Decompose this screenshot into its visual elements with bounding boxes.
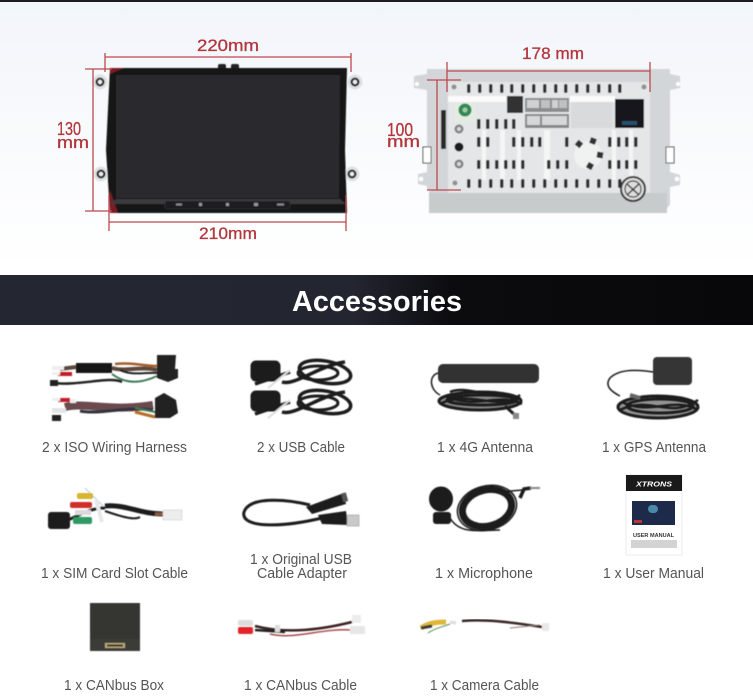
label: 1 x CANbus Cable: [244, 678, 357, 694]
icon: 4G antenna: [431, 364, 539, 419]
icon: USB cables: [251, 357, 353, 418]
item: ISO wiring harness: [42, 355, 187, 456]
heading: 100 mm: [387, 120, 420, 151]
arrow: 220mm dimension line: [105, 53, 351, 72]
heading: 210mm: 210mm: [199, 224, 257, 243]
heading: 178 mm: 178 mm: [522, 44, 584, 63]
heading: 130 mm: [57, 119, 89, 152]
icon: microphone: [430, 479, 540, 537]
icon: user manual booklet: XTRONS: [635, 482, 672, 488]
heading: 130 mm: mm: [57, 133, 89, 152]
icon: SIM cable: [48, 488, 182, 529]
item: CANbus cable: [238, 615, 365, 694]
heading: 100 mm: 100: [387, 120, 413, 140]
icon: user manual booklet: USER MANUAL: [633, 533, 674, 539]
item: microphone: [430, 479, 540, 582]
arrow: 210mm dimension line: [109, 195, 346, 231]
icon: wiring harness: [50, 355, 178, 421]
label: [250, 552, 352, 582]
item: SIM card slot cable: [41, 488, 188, 582]
heading: Accessories: Accessories: [292, 286, 462, 318]
icon: USB adapter: [244, 492, 359, 526]
item: 4G antenna: [431, 364, 539, 456]
panel: rear unit dimensions: [387, 44, 680, 213]
label: 1 x 4G Antenna: [437, 440, 534, 456]
label: 1 x GPS Antenna: [602, 440, 707, 456]
label: 1 x CANbus Box: [64, 678, 165, 694]
icon: front head unit: [92, 64, 362, 213]
label: 1 x SIM Card Slot Cable: [41, 566, 188, 582]
label: 2 x ISO Wiring Harness: [42, 440, 187, 456]
label: 1 x Original USB: [250, 552, 352, 568]
icon: CANbus cable: [238, 615, 365, 636]
heading: 100 mm: mm: [387, 132, 420, 151]
item: user manual: [603, 475, 704, 582]
banner: accessories: [0, 275, 753, 325]
icon: user manual booklet: [626, 475, 682, 555]
item: GPS antenna: [602, 357, 707, 456]
arrow: 178 mm dimension line: [447, 62, 650, 92]
icon: rear chassis: [414, 69, 680, 213]
item: USB cable: [251, 357, 353, 456]
icon: GPS antenna: [608, 357, 698, 418]
item: original USB cable adapter: [244, 492, 359, 582]
heading: 220mm: 220mm: [197, 36, 259, 55]
icon: CANbus box: [90, 603, 140, 651]
arrow: 130mm dimension line: [85, 69, 112, 211]
item: CANbus box: [64, 603, 165, 694]
panel: front unit dimensions: [57, 36, 362, 243]
icon: camera cable: [421, 620, 549, 633]
item: camera cable: [421, 620, 549, 694]
label: 1 x Camera Cable: [430, 678, 539, 694]
label: 1 x Microphone: [435, 566, 533, 582]
label: 2 x USB Cable: [257, 440, 345, 456]
arrow: 100 mm dimension line: [427, 80, 461, 190]
heading: 130 mm: 130: [57, 119, 81, 139]
label: 1 x User Manual: [603, 566, 704, 582]
label: Cable Adapter: [257, 566, 347, 582]
